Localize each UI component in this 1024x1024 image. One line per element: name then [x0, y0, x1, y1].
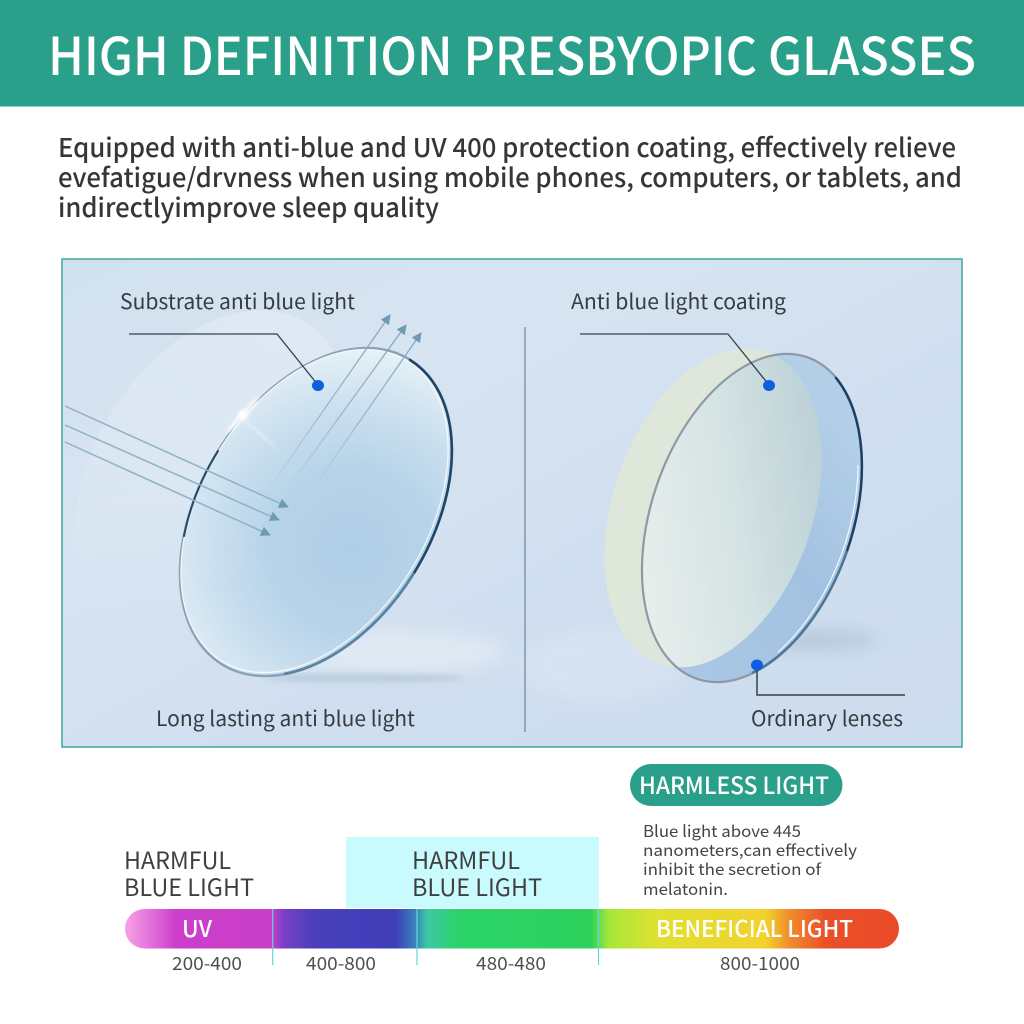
label: long lasting anti blue light: Long lasting anti blue light [156, 703, 415, 733]
harmless light description [643, 818, 858, 900]
wavelength labels: 480-480 [476, 950, 546, 976]
harmful blue light label: left: HARMFUL [124, 841, 231, 876]
harmless light description: inhibit the secretion of [643, 856, 822, 880]
wavelength labels: 200-400 [172, 950, 242, 976]
glare on lens rim [225, 395, 279, 450]
intro text block: evefatigue/drvness when using mobile phones, computers, or tablets, and [58, 158, 962, 195]
callout: ordinary lenses [751, 660, 905, 733]
harmful blue light label: left [124, 841, 254, 903]
callout: anti blue light coating: Anti blue light coating [571, 286, 786, 316]
intro text block [58, 128, 962, 225]
harmless light pill: HARMLESS LIGHT [639, 766, 829, 801]
harmless light description: melatonin. [643, 876, 728, 900]
exit arrows [268, 315, 421, 492]
intro text block: indirectlyimprove sleep quality [58, 188, 439, 225]
callout: substrate anti blue light [120, 286, 355, 391]
harmful blue light highlight box [346, 837, 599, 908]
harmless light description: Blue light above 445 [643, 818, 801, 842]
lens illustration: anti blue light coating [604, 348, 872, 684]
spectrum bar: UV [182, 910, 212, 944]
wavelength labels: 800-1000 [720, 950, 800, 976]
harmful blue light highlight box: HARMFUL [412, 841, 520, 876]
harmful blue light highlight box: BLUE LIGHT [412, 868, 542, 903]
wavelength labels: 400-800 [306, 950, 376, 976]
harmless light description: nanometers,can effectively [643, 837, 858, 861]
spectrum ticks [273, 909, 598, 965]
harmful blue light label: left: BLUE LIGHT [124, 868, 254, 903]
callout: ordinary lenses: Ordinary lenses [751, 703, 903, 733]
spectrum bar [125, 909, 899, 948]
intro text block: Equipped with anti-blue and UV 400 protection coating, effectively relieve [58, 128, 956, 165]
wavelength labels [172, 950, 800, 976]
header banner [0, 0, 1024, 106]
header banner: HIGH DEFINITION PRESBYOPIC GLASSES [48, 15, 976, 90]
spectrum bar: BENEFICIAL LIGHT [656, 910, 853, 944]
callout: anti blue light coating [571, 286, 786, 391]
callout: substrate anti blue light: Substrate anti blue light [120, 286, 355, 316]
entry arrows [65, 406, 288, 535]
divider between lens diagrams [524, 327, 526, 732]
lens illustration: substrate anti blue light [18, 261, 508, 725]
panel: lens comparison [18, 259, 962, 747]
